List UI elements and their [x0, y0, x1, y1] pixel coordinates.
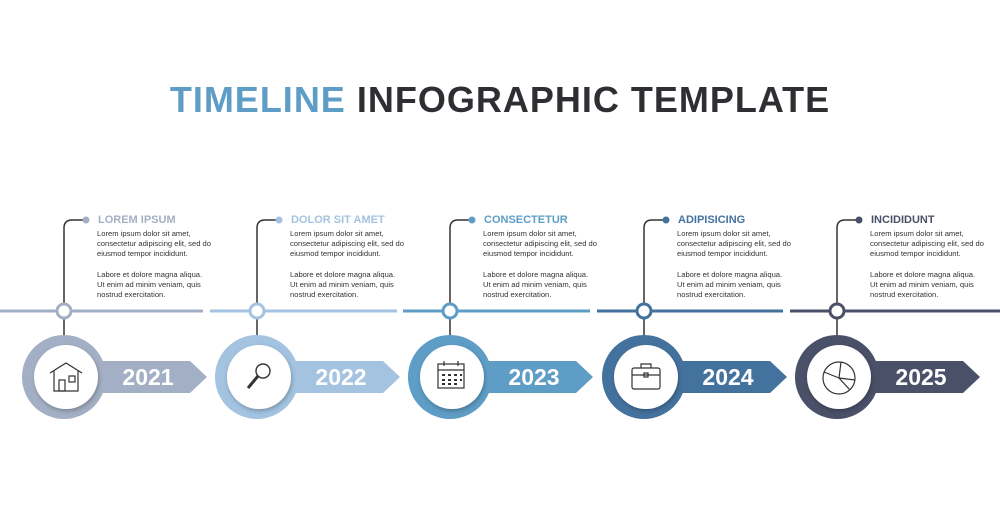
text: Ut enim ad minim veniam, quis: [677, 280, 781, 289]
text: step 5: [870, 214, 984, 299]
step 4: [597, 216, 787, 419]
text: eiusmod tempor incididunt.: [483, 249, 574, 258]
text: DOLOR SIT AMET: [291, 214, 385, 226]
step 1: 2021: [122, 364, 174, 390]
title: TIMELINE INFOGRAPHIC TEMPLATE: [170, 79, 830, 120]
text: Labore et dolore magna aliqua.: [97, 270, 202, 279]
text: Lorem ipsum dolor sit amet,: [870, 229, 964, 238]
text: Labore et dolore magna aliqua.: [870, 270, 975, 279]
text: Ut enim ad minim veniam, quis: [870, 280, 974, 289]
text: ADIPISICING: [678, 214, 745, 226]
text: nostrud exercitation.: [97, 290, 165, 299]
text: consectetur adipiscing elit, sed do: [677, 239, 791, 248]
icon: magnifier: [248, 364, 270, 388]
text: Lorem ipsum dolor sit amet,: [97, 229, 191, 238]
text: consectetur adipiscing elit, sed do: [97, 239, 211, 248]
text: nostrud exercitation.: [677, 290, 745, 299]
text: Ut enim ad minim veniam, quis: [290, 280, 394, 289]
text: CONSECTETUR: [484, 214, 568, 226]
step 2: 2022: [315, 364, 367, 390]
step 5: 2025: [895, 364, 947, 390]
icon: house: [50, 363, 82, 391]
step 2: [210, 216, 400, 419]
text: step 3: [483, 214, 597, 299]
text: Ut enim ad minim veniam, quis: [97, 280, 201, 289]
text: Lorem ipsum dolor sit amet,: [483, 229, 577, 238]
text: nostrud exercitation.: [483, 290, 551, 299]
text: step 1: [97, 214, 211, 299]
text: LOREM IPSUM: [98, 214, 176, 226]
text: consectetur adipiscing elit, sed do: [870, 239, 984, 248]
text: nostrud exercitation.: [290, 290, 358, 299]
text: step 4: [677, 214, 791, 299]
text: consectetur adipiscing elit, sed do: [483, 239, 597, 248]
text: eiusmod tempor incididunt.: [870, 249, 961, 258]
step 4: 2024: [702, 364, 754, 390]
icon: briefcase: [632, 364, 660, 389]
text: consectetur adipiscing elit, sed do: [290, 239, 404, 248]
text: eiusmod tempor incididunt.: [97, 249, 188, 258]
text: eiusmod tempor incididunt.: [677, 249, 768, 258]
step 3: 2023: [508, 364, 560, 390]
icon: pie chart: [823, 362, 855, 394]
icon: calendar: [438, 361, 464, 388]
step 5: [790, 216, 1000, 419]
text: INCIDIDUNT: [871, 214, 935, 226]
step 1: [0, 216, 207, 419]
text: Lorem ipsum dolor sit amet,: [290, 229, 384, 238]
text: step 2: [290, 214, 404, 299]
text: Lorem ipsum dolor sit amet,: [677, 229, 771, 238]
text: Ut enim ad minim veniam, quis: [483, 280, 587, 289]
text: nostrud exercitation.: [870, 290, 938, 299]
text: Labore et dolore magna aliqua.: [677, 270, 782, 279]
text: Labore et dolore magna aliqua.: [483, 270, 588, 279]
step 3: [403, 216, 593, 419]
text: Labore et dolore magna aliqua.: [290, 270, 395, 279]
text: eiusmod tempor incididunt.: [290, 249, 381, 258]
